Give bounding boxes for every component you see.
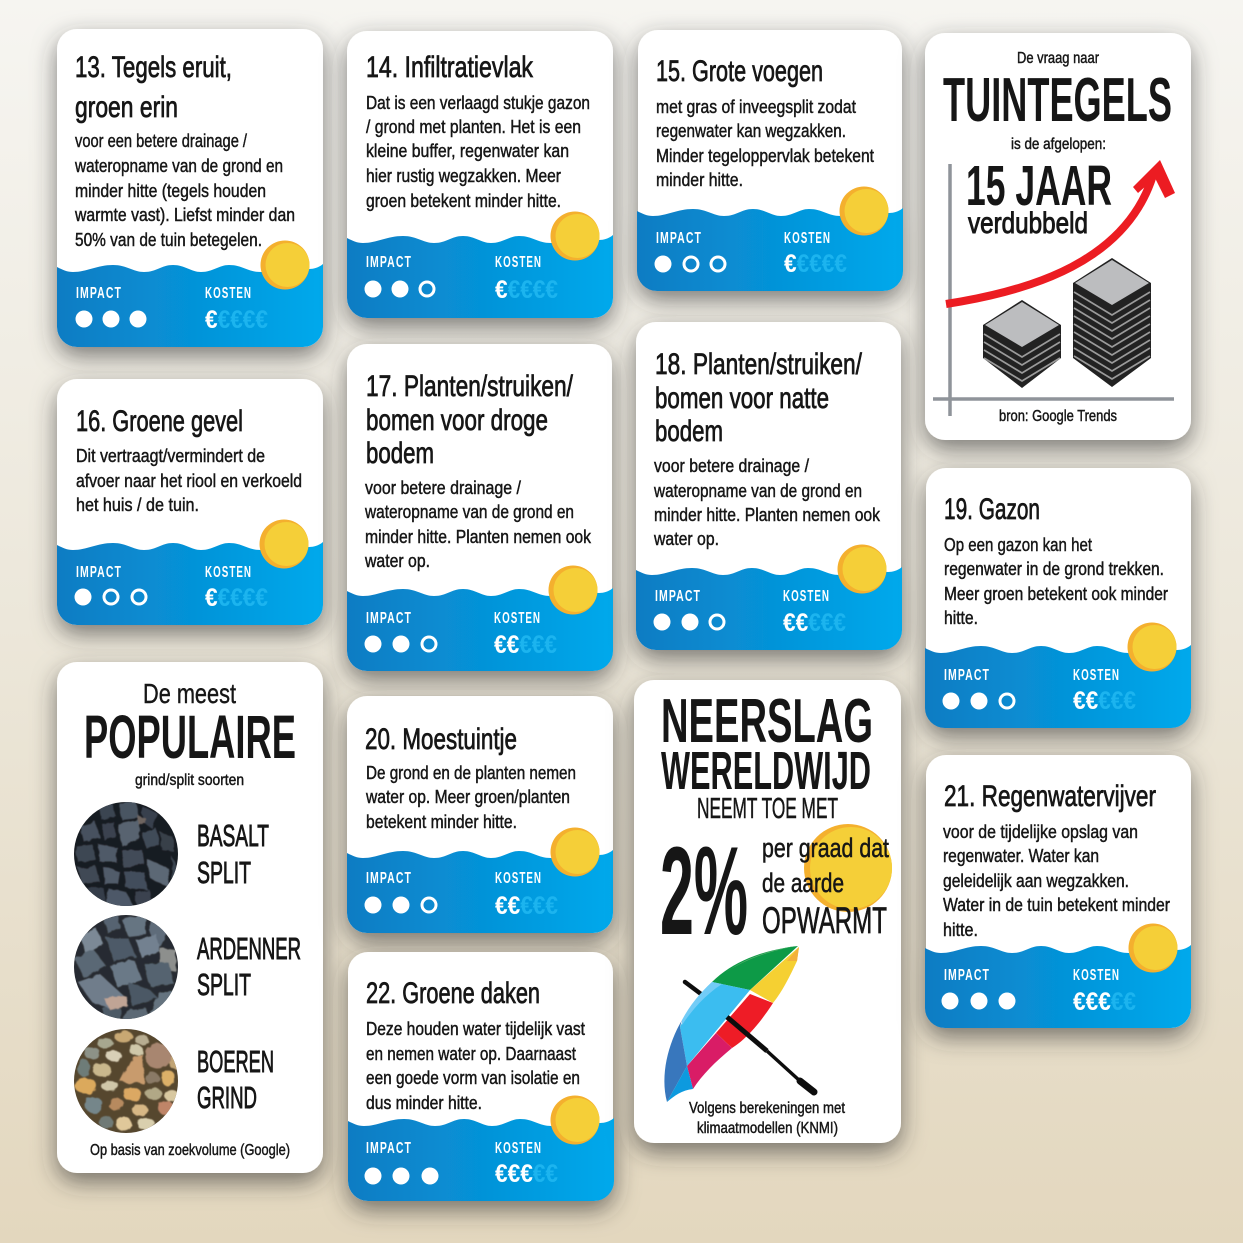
cost rating: [784, 230, 847, 278]
body text: het huis / de tuin.: [76, 495, 199, 515]
impact rating: IMPACT: [944, 667, 990, 684]
heading: 19. Gazon: [944, 493, 1040, 526]
impact rating: [364, 870, 436, 914]
body text: betekent minder hitte.: [366, 812, 517, 832]
label: basalt split: [197, 818, 269, 890]
cost rating: €€: [783, 609, 808, 637]
cost rating: [495, 254, 558, 304]
heading: 13. Tegels eruit,: [75, 51, 232, 84]
label: basalt split: BASALT: [197, 818, 269, 853]
body text: regenwater. Water kan: [943, 846, 1099, 866]
cost rating: €€: [533, 1160, 558, 1188]
cost rating: €: [495, 276, 508, 304]
cost rating: €€€: [808, 609, 846, 637]
card 17: Planten voor droge bodem: [347, 344, 613, 671]
impact rating: [654, 230, 725, 272]
cost rating: €: [205, 584, 218, 612]
body text: groen betekent minder hitte.: [366, 191, 561, 211]
intro text: De meest: [143, 678, 236, 709]
icon: sun: [260, 240, 310, 290]
water footer: [636, 567, 902, 650]
cost rating: [783, 588, 846, 637]
body text: water op. Meer groen/planten: [365, 787, 570, 807]
body text: en nemen water op. Daarnaast: [366, 1044, 576, 1064]
arrow: rising red: [946, 160, 1175, 304]
icon: umbrella: [664, 946, 814, 1102]
impact rating: IMPACT: [366, 610, 412, 627]
heading: [75, 51, 232, 124]
heading: bodem: [366, 437, 434, 470]
icon: sun: [838, 544, 886, 594]
body text: minder hitte. Planten nemen ook: [654, 505, 881, 525]
cost rating: KOSTEN: [205, 564, 252, 581]
stat: 15 jaar: 15 JAAR: [966, 154, 1112, 218]
body text: geleidelijk aan wegzakken.: [943, 871, 1129, 891]
card 21: Regenwatervijver: [925, 755, 1191, 1028]
body text: voor betere drainage /: [654, 456, 809, 476]
cost rating: [1073, 667, 1136, 715]
heading: bomen voor droge: [366, 404, 548, 437]
water footer: [637, 208, 903, 291]
body text: Dit vertraagt/vermindert de: [76, 446, 265, 466]
source: Op basis van zoekvolume (Google): [90, 1142, 290, 1159]
label: ardenner split: [197, 931, 301, 1002]
body text: water op.: [653, 529, 719, 549]
icon: sun: [804, 824, 892, 912]
water footer: [925, 945, 1191, 1028]
body text: dus minder hitte.: [366, 1093, 482, 1113]
cost rating: KOSTEN: [783, 588, 830, 605]
icon: sun: [550, 212, 600, 260]
cost rating: KOSTEN: [205, 285, 252, 302]
card 22: Groene daken: [348, 952, 614, 1201]
cost rating: €€€€: [508, 276, 558, 304]
impact rating: [364, 610, 436, 652]
heading: bodem: [655, 415, 723, 448]
body text: Deze houden water tijdelijk vast: [366, 1019, 585, 1039]
body text: een goede vorm van isolatie en: [366, 1068, 580, 1088]
heading: 18. Planten/struiken/: [655, 348, 862, 381]
water footer: [347, 850, 613, 933]
body text: warmte vast). Liefst minder dan: [74, 205, 295, 225]
cost rating: €€: [494, 631, 519, 659]
impact rating: IMPACT: [76, 285, 122, 302]
heading: 22. Groene daken: [366, 977, 540, 1010]
body text: [656, 97, 874, 190]
heading: neerslag wereldwijd: [661, 687, 873, 801]
cost rating: [494, 610, 557, 659]
cost rating: €: [205, 306, 218, 334]
water footer: [57, 542, 323, 625]
body text: [944, 535, 1168, 628]
cost rating: KOSTEN: [784, 230, 831, 247]
panel: populaire grindsoorten: [57, 662, 323, 1173]
impact rating: [942, 967, 1016, 1010]
heading: neerslag wereldwijd: WERELDWIJD: [661, 741, 871, 801]
photo: boeren grind: [74, 1029, 179, 1133]
body text: Minder tegeloppervlak betekent: [656, 146, 874, 166]
heading: 17. Planten/struiken/: [366, 370, 573, 403]
label: boeren grind: GRIND: [197, 1080, 257, 1115]
panel: neerslag wereldwijd: 2%: [660, 822, 748, 961]
cost rating: KOSTEN: [1073, 967, 1120, 984]
cost rating: KOSTEN: [495, 254, 542, 271]
stat description: per graad dat: [762, 833, 889, 863]
body text: [653, 456, 881, 549]
subheading: NEEMT TOE MET: [697, 793, 838, 825]
body text: [366, 1019, 585, 1113]
impact rating: [654, 588, 724, 630]
card 19: Gazon: [925, 468, 1191, 728]
card 18: Planten voor natte bodem: [636, 322, 902, 650]
cost rating: KOSTEN: [494, 610, 541, 627]
body text: / grond met planten. Het is een: [366, 117, 581, 137]
body text: [943, 822, 1170, 940]
heading: 21. Regenwatervijver: [944, 780, 1156, 813]
cost rating: [495, 870, 558, 920]
body text: [76, 446, 302, 515]
water footer: [347, 588, 613, 671]
cost rating: KOSTEN: [495, 870, 542, 887]
icon: small tile stack: [983, 300, 1061, 388]
impact rating: [942, 667, 1014, 710]
heading: [655, 348, 862, 448]
body text: wateropname van de grond en: [74, 156, 283, 176]
impact rating: [76, 285, 146, 328]
body text: 50% van de tuin betegelen.: [75, 230, 262, 250]
heading: bomen voor natte: [655, 382, 829, 415]
cost rating: KOSTEN: [1073, 667, 1120, 684]
cost rating: €€€€: [218, 584, 268, 612]
heading: 14. Infiltratievlak: [366, 51, 534, 84]
icon: sun: [260, 520, 308, 568]
body text: Water in de tuin betekent minder: [943, 895, 1170, 915]
cost rating: €€€: [1098, 687, 1136, 715]
card 15: Grote voegen: [637, 30, 903, 291]
stat description: de aarde: [762, 868, 844, 898]
label: boeren grind: BOEREN: [197, 1044, 274, 1079]
heading: 20. Moestuintje: [365, 723, 517, 756]
subtext: is de afgelopen:: [1011, 136, 1106, 153]
cost rating: €€€€: [797, 250, 847, 278]
body text: voor de tijdelijke opslag van: [943, 822, 1138, 842]
body text: regenwater kan wegzakken.: [656, 121, 846, 141]
card 14: Infiltratievlak: [347, 31, 613, 318]
stat description: OPWARMT: [762, 900, 887, 941]
impact rating: [364, 254, 434, 298]
body text: wateropname van de grond en: [364, 502, 574, 522]
impact rating: IMPACT: [655, 588, 701, 605]
water footer: [348, 1118, 614, 1201]
body text: [74, 131, 295, 250]
water footer: [347, 235, 613, 318]
body text: minder hitte.: [656, 170, 743, 190]
subtext: grind/split soorten: [135, 772, 244, 789]
body text: regenwater in de grond trekken.: [944, 559, 1164, 579]
heading: [366, 370, 573, 470]
heading: groen erin: [75, 91, 178, 124]
stat description: [762, 833, 889, 941]
icon: sun: [1128, 924, 1178, 972]
body text: Op een gazon kan het: [944, 535, 1092, 555]
label: ardenner split: ARDENNER: [197, 931, 301, 966]
impact rating: IMPACT: [366, 870, 412, 887]
impact rating: IMPACT: [656, 230, 702, 247]
cost rating: €: [784, 250, 797, 278]
cost rating: €€: [495, 892, 520, 920]
icon: sun: [550, 1096, 600, 1144]
body text: hier rustig wegzakken. Meer: [366, 166, 561, 186]
icon: sun: [1128, 622, 1176, 672]
body text: met gras of inveegsplit zodat: [656, 97, 856, 117]
source: Volgens berekeningen met: [689, 1100, 845, 1117]
photo: basalt split: [74, 802, 178, 908]
cost rating: [205, 564, 268, 612]
body text: minder hitte. Planten nemen ook: [365, 527, 592, 547]
heading: neerslag wereldwijd: NEERSLAG: [661, 687, 873, 756]
body text: voor een betere drainage /: [75, 131, 247, 151]
cost rating: €€: [1111, 988, 1136, 1016]
body text: [364, 478, 592, 571]
body text: minder hitte (tegels houden: [75, 181, 266, 201]
intro text: De vraag naar: [1017, 50, 1100, 67]
source: bron: Google Trends: [999, 408, 1117, 425]
icon: sun: [550, 828, 600, 876]
card 20: Moestuintje: [347, 696, 613, 933]
icon: sun: [840, 186, 888, 236]
cost rating: [495, 1140, 558, 1188]
cost rating: [205, 285, 268, 334]
impact rating: IMPACT: [366, 254, 412, 271]
body text: De grond en de planten nemen: [366, 763, 576, 783]
heading: 16. Groene gevel: [76, 405, 243, 438]
body text: hitte.: [944, 608, 978, 628]
impact rating: [364, 1140, 438, 1184]
source: [689, 1100, 845, 1137]
icon: sun: [548, 566, 598, 614]
cost rating: €€€: [520, 892, 558, 920]
body text: wateropname van de grond en: [653, 481, 862, 501]
water footer: [925, 645, 1191, 728]
body text: hitte.: [943, 920, 978, 940]
body text: afvoer naar het riool en verkoeld: [76, 471, 302, 491]
cost rating: €€€€: [218, 306, 268, 334]
body text: water op.: [364, 551, 430, 571]
cost rating: [1073, 967, 1136, 1016]
source: klimaatmodellen (KNMI): [697, 1120, 838, 1137]
body text: [365, 763, 576, 832]
body text: Meer groen betekent ook minder: [944, 584, 1168, 604]
panel: vraag naar tuintegels: [925, 33, 1191, 440]
panel: neerslag wereldwijd: [634, 680, 901, 1143]
body text: voor betere drainage /: [365, 478, 521, 498]
cost rating: €€: [1073, 687, 1098, 715]
cost rating: €€€: [1073, 988, 1111, 1016]
icon: large tile stack: [1073, 258, 1151, 387]
cost rating: €€€: [495, 1160, 533, 1188]
body text: Dat is een verlaagd stukje gazon: [366, 93, 590, 113]
impact rating: IMPACT: [366, 1140, 412, 1157]
stat label: verdubbeld: [968, 207, 1088, 240]
card 13: Tegels eruit: [57, 29, 323, 347]
heading: 15. Grote voegen: [656, 55, 823, 88]
heading: POPULAIRE: POPULAIRE: [84, 703, 296, 771]
impact rating: IMPACT: [944, 967, 990, 984]
cost rating: KOSTEN: [495, 1140, 542, 1157]
label: boeren grind: [197, 1044, 274, 1115]
chart axes: [933, 164, 1174, 416]
card 16: Groene gevel: [57, 379, 323, 625]
cost rating: €€€: [519, 631, 557, 659]
photo: ardenner split: [74, 914, 178, 1020]
impact rating: [74, 564, 146, 606]
body text: kleine buffer, regenwater kan: [366, 141, 569, 161]
body text: [366, 93, 590, 211]
label: basalt split: SPLIT: [197, 855, 251, 890]
water footer: [57, 264, 323, 347]
impact rating: IMPACT: [76, 564, 122, 581]
label: ardenner split: SPLIT: [197, 967, 251, 1002]
